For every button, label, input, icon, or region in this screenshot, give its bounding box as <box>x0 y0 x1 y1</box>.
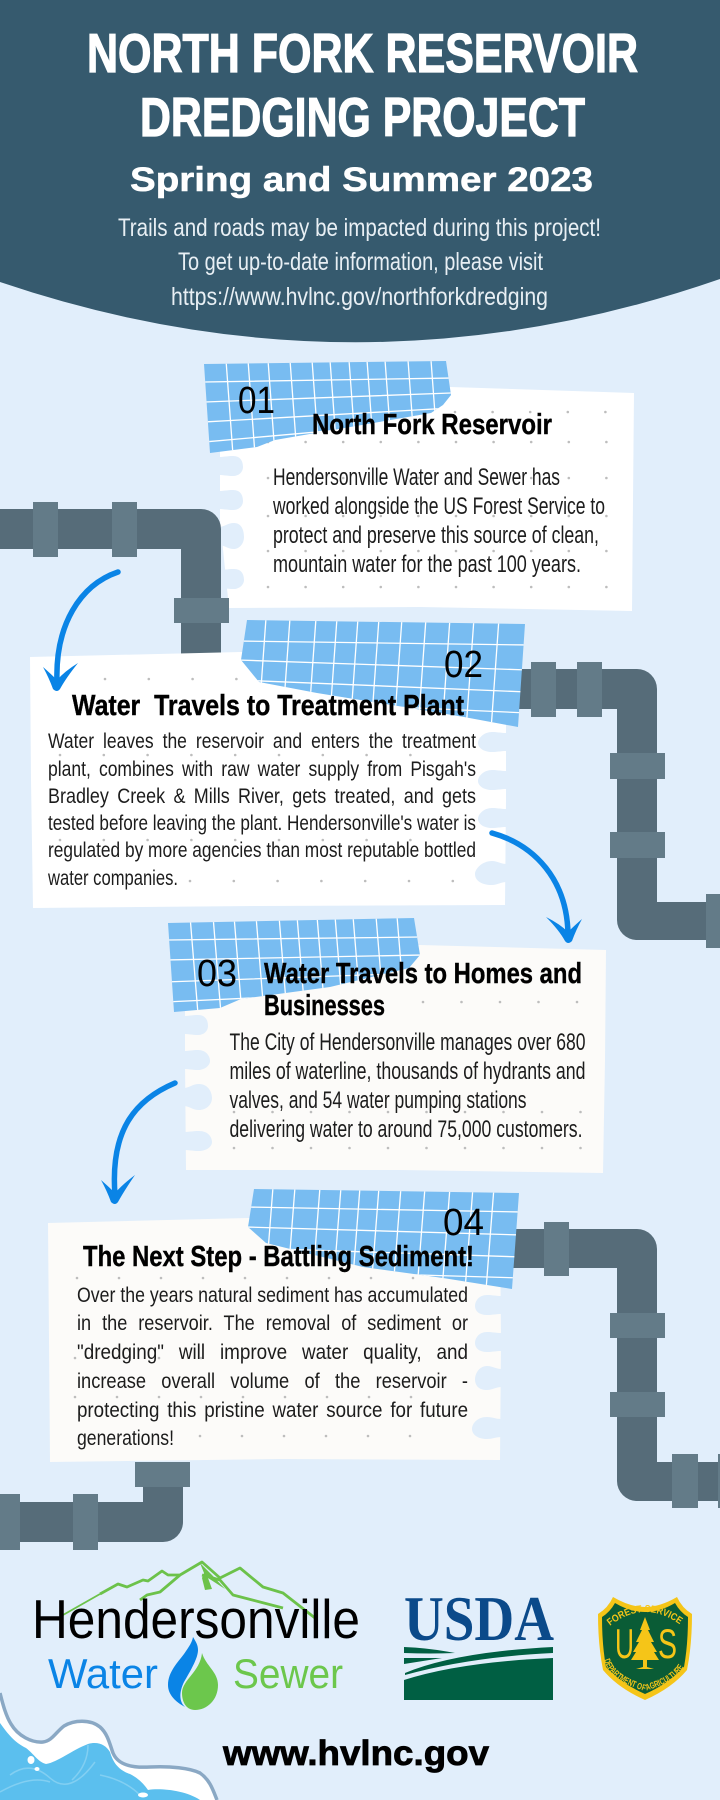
wordmark: Hendersonville <box>32 1588 360 1650</box>
paper <box>48 1218 501 1462</box>
binder notches <box>472 1295 502 1439</box>
logo: Hendersonville Water Sewer <box>32 1562 360 1710</box>
body text: mountain water for the past 100 years. <box>273 551 581 578</box>
binder notches <box>218 456 244 589</box>
banner shape <box>0 0 720 342</box>
body text: in the reservoir. The removal of sediment or <box>77 1311 468 1335</box>
body text: protect and preserve this source of clean, <box>273 522 599 549</box>
paper dots <box>75 1278 450 1436</box>
water illustration <box>0 1693 217 1800</box>
seal text: FOREST SERVICE <box>606 1605 684 1626</box>
body text: Over the years natural sediment has accumulated <box>77 1283 468 1307</box>
paper dots <box>60 679 455 881</box>
shoreline edge <box>0 1693 217 1800</box>
notice text: https://www.hvlnc.gov/northforkdredging <box>171 283 548 311</box>
title <box>87 22 638 148</box>
body text: water companies. <box>47 866 178 890</box>
tape with step number: 04 <box>443 1202 484 1244</box>
paper <box>220 387 634 611</box>
tape with step number: 01 <box>238 380 275 422</box>
pipe: right elbow upper <box>515 662 720 948</box>
heading: Water Travels to Homes and <box>264 958 582 990</box>
word: Water: Water <box>48 1650 158 1697</box>
arrow: step 2 to step 3 <box>492 833 582 943</box>
footer website: www.hvlnc.gov <box>222 1734 490 1773</box>
panel: step 3 Water Travels to Homes and Businesses <box>165 916 606 1173</box>
water <box>0 1723 200 1800</box>
notice text <box>118 214 601 311</box>
body text: valves, and 54 water pumping stations <box>230 1087 526 1114</box>
seal text <box>604 1605 684 1690</box>
binder notches <box>183 1015 212 1151</box>
body text: Hendersonville Water and Sewer has <box>273 464 560 491</box>
heading: North Fork Reservoir <box>312 409 552 441</box>
mountain outline <box>63 1562 315 1618</box>
body text: tested before leaving the plant. Hendersonville's water is <box>48 811 476 835</box>
panel: step 4 The Next Step - Battling Sediment <box>48 1187 522 1462</box>
tape with step number <box>204 360 452 455</box>
body text: Water leaves the reservoir and enters the treatment <box>48 729 476 753</box>
U S letters: S <box>658 1620 677 1667</box>
body text: increase overall volume of the reservoir - <box>77 1369 468 1393</box>
notice text: To get up-to-date information, please visit <box>178 248 543 276</box>
pipe: upper left elbow <box>0 502 229 660</box>
U S letters: U <box>615 1620 634 1667</box>
tape with step number: 02 <box>444 644 483 686</box>
U S letters <box>615 1620 677 1667</box>
foam <box>0 1693 217 1800</box>
logo: Forest Service shield <box>598 1597 692 1700</box>
logo: USDA <box>404 1583 554 1700</box>
pipe: right elbow lower <box>510 1222 720 1508</box>
tape with step number <box>238 618 528 730</box>
body text: plant, combines with raw water supply from Pisgah's <box>48 757 476 781</box>
paper dots <box>234 1002 581 1148</box>
tape with step number: 03 <box>197 953 237 995</box>
panel: step 1 North Fork Reservoir <box>204 360 634 611</box>
pipe: lower left elbow <box>0 1462 190 1550</box>
title: DREDGING PROJECT <box>140 86 585 148</box>
mountain peak <box>200 1563 225 1590</box>
body text: regulated by more agencies than most reputable bottled <box>48 838 476 862</box>
body text: protecting this pristine water source for future <box>77 1398 468 1422</box>
foam spots <box>28 1756 148 1798</box>
body text: miles of waterline, thousands of hydrants and <box>230 1058 586 1085</box>
shield <box>598 1597 692 1700</box>
paper <box>30 652 506 908</box>
tape with step number <box>246 1187 522 1290</box>
icon: water drop <box>168 1637 218 1710</box>
paper <box>185 945 606 1173</box>
body text <box>272 464 605 578</box>
arrow: step 3 to step 4 <box>101 1083 175 1204</box>
arrow: step 1 to step 2 <box>43 572 118 691</box>
body text: generations! <box>77 1426 174 1450</box>
body text <box>230 1029 586 1143</box>
notice text: Trails and roads may be impacted during this project! <box>118 214 601 242</box>
body text: The City of Hendersonville manages over 680 <box>230 1029 586 1056</box>
logo: USDA: USDA <box>404 1583 554 1654</box>
heading: The Next Step - Battling Sediment! <box>83 1241 474 1273</box>
header banner <box>0 0 720 342</box>
word: Sewer: Sewer <box>233 1650 343 1697</box>
body text <box>47 729 476 890</box>
icon: pine tree <box>631 1617 659 1669</box>
subtitle: Spring and Summer 2023 <box>130 161 593 199</box>
binder notches <box>475 732 507 885</box>
heading: Businesses <box>264 990 385 1022</box>
tape with step number <box>165 916 422 1014</box>
body text: delivering water to around 75,000 customers. <box>230 1116 582 1143</box>
water ripples <box>0 1745 140 1795</box>
heading <box>264 958 582 1022</box>
panel: step 2 Water Travels to Treatment Plant <box>30 618 528 908</box>
body text: "dredging" will improve water quality, and <box>77 1340 468 1364</box>
body text: worked alongside the US Forest Service to <box>272 493 605 520</box>
seal text: DEPARTMENT OF AGRICULTURE <box>604 1658 684 1690</box>
heading: Water Travels to Treatment Plant <box>72 690 464 722</box>
paper dots <box>268 412 609 587</box>
body text <box>77 1283 468 1450</box>
body text: Bradley Creek & Mills River, gets treated, and gets <box>48 784 476 808</box>
